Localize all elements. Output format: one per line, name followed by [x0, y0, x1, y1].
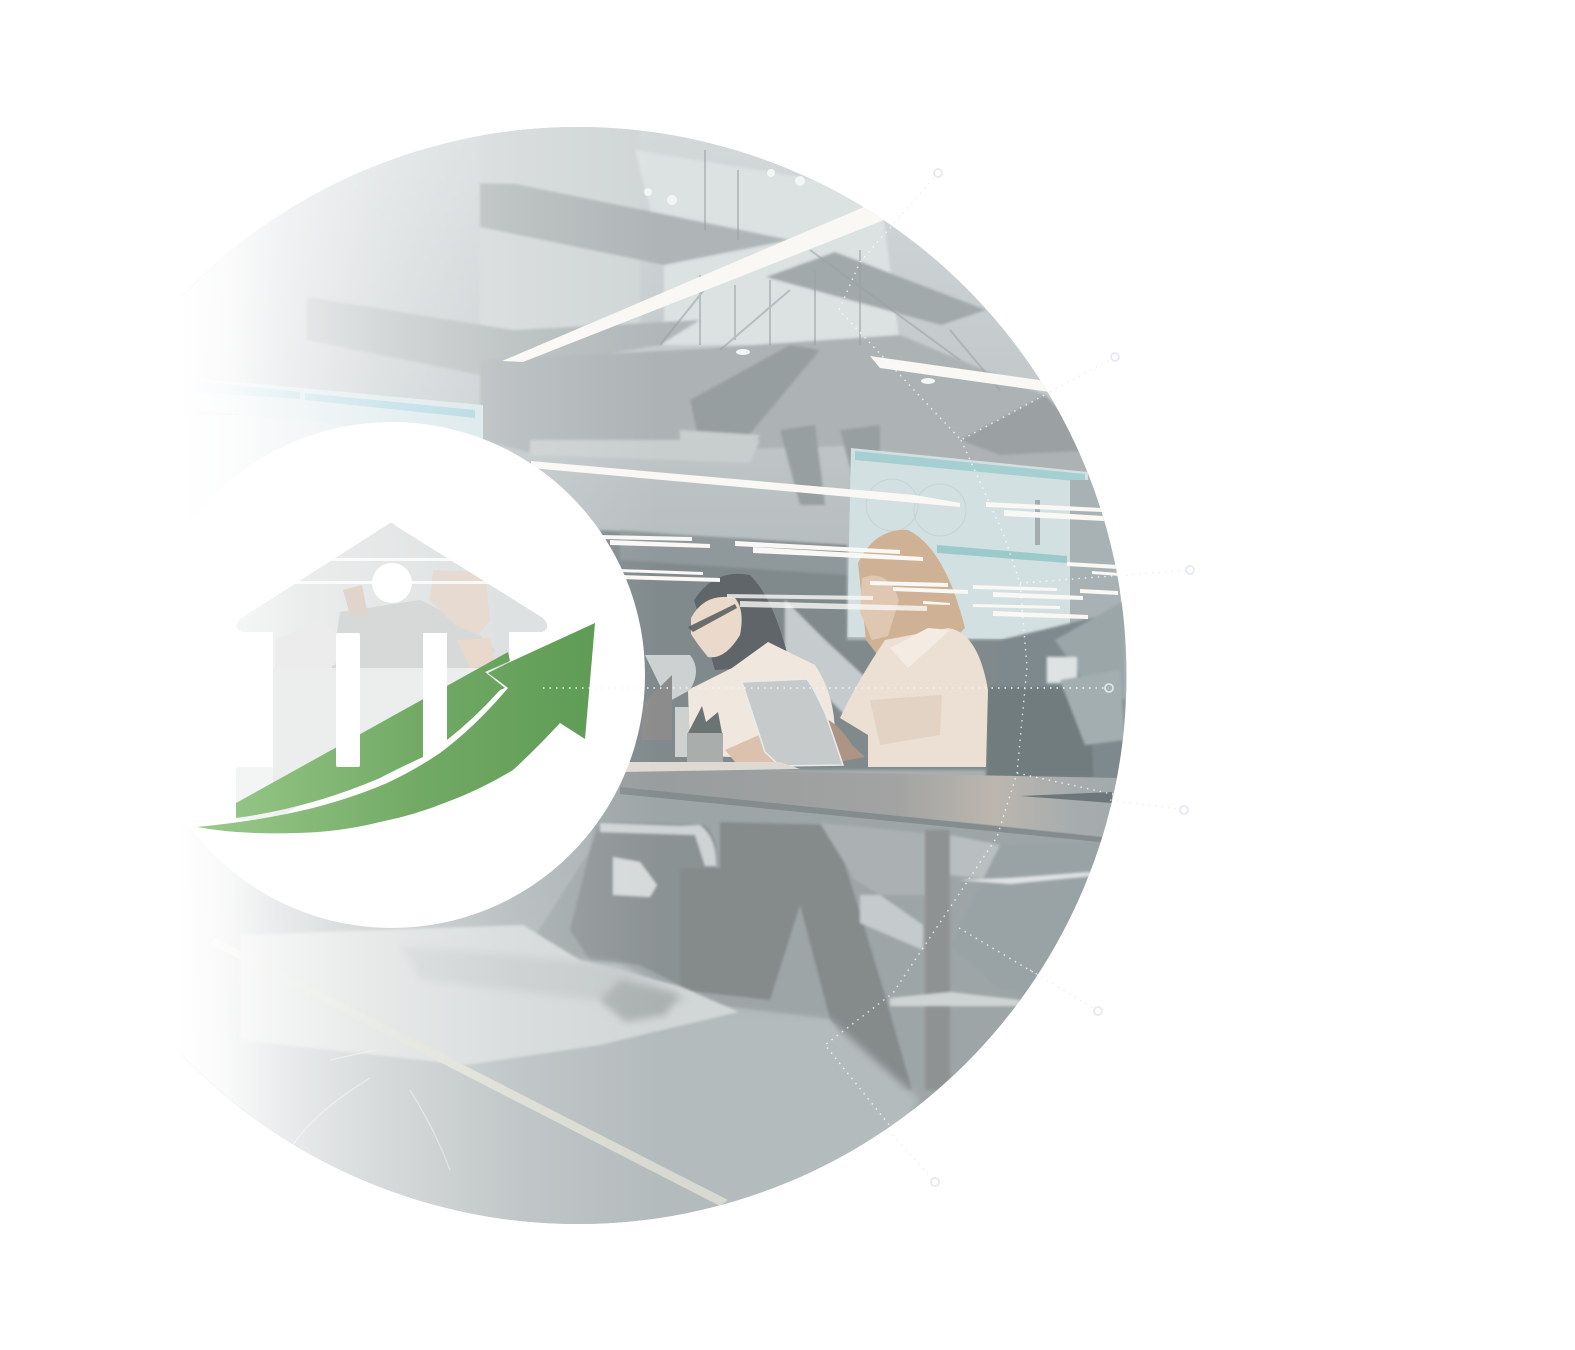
network node: low — [1094, 1007, 1102, 1015]
network node: top — [934, 169, 942, 177]
tablet — [742, 679, 843, 766]
atrium lamps — [644, 169, 935, 384]
house photo window — [230, 520, 550, 830]
network node: lower right — [1180, 806, 1188, 814]
woman with glasses — [642, 574, 835, 762]
floor glints — [290, 1050, 450, 1170]
white badge circle — [139, 422, 645, 928]
dotted network lines inside photo — [826, 226, 1118, 1125]
base block — [236, 767, 273, 819]
roof dot — [372, 563, 412, 603]
lower floor — [220, 1018, 919, 1224]
foreground chair — [240, 925, 739, 1065]
illustration canvas — [180, 127, 1195, 1224]
dark wall behind the women — [600, 530, 1125, 780]
pillar right — [423, 633, 447, 759]
under-table scene — [538, 786, 1104, 1110]
wall screen — [847, 448, 1120, 645]
left window band — [274, 387, 483, 450]
atrium window mullions — [660, 150, 1000, 390]
ceiling light strips — [502, 207, 1120, 619]
plant and glass — [675, 706, 723, 767]
network node: bottom — [931, 1178, 939, 1186]
dotted centre line — [543, 687, 1109, 689]
diagonal floor stripe — [438, 1061, 728, 1206]
network node: centre right — [1105, 684, 1113, 692]
main arrow — [197, 623, 595, 833]
network node: upper right — [1111, 353, 1119, 361]
bank icon with growth arrow — [197, 520, 595, 833]
upper atrium structure — [307, 126, 1120, 505]
blonde woman — [828, 530, 988, 767]
dotted lines outside photo — [884, 173, 1190, 1182]
left white fade — [180, 131, 606, 1224]
network node: right — [1186, 566, 1194, 574]
conference table — [610, 762, 1120, 843]
upper arrow band — [236, 652, 510, 818]
pillar left — [336, 633, 360, 767]
circular office photo — [180, 120, 1140, 1240]
